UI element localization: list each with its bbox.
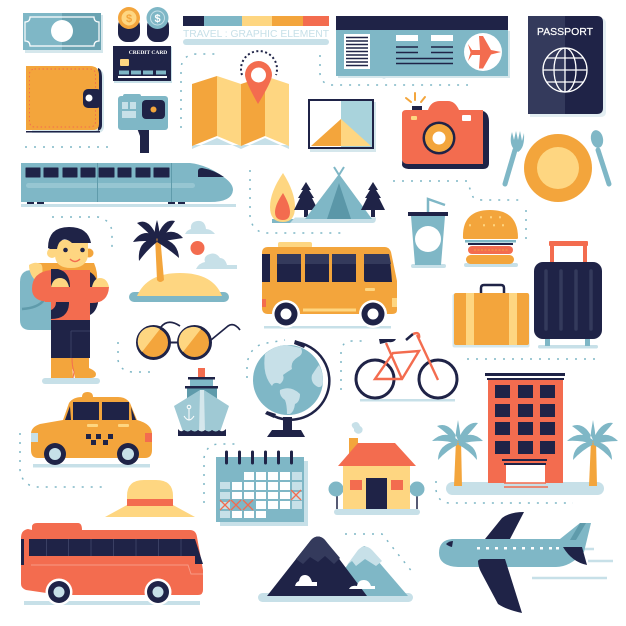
icon: mountains	[258, 536, 413, 602]
icon: airplane	[439, 512, 613, 613]
icon: rolling luggage	[534, 241, 602, 348]
title: TRAVEL : GRAPHIC ELEMENT	[183, 28, 330, 40]
icon: passport: PASSPORT	[537, 26, 594, 38]
icon: calendar	[216, 452, 308, 526]
icon: bullet train	[21, 163, 236, 207]
icon: camera	[402, 93, 489, 169]
icon: burger	[463, 210, 518, 267]
icon: yellow van	[262, 242, 397, 328]
icon: credit card	[113, 46, 172, 83]
icon: action camera	[118, 94, 168, 153]
icon: credit card: CREDIT CARD	[129, 50, 167, 56]
icon: passport	[528, 16, 606, 117]
icon: sunglasses	[138, 322, 240, 358]
icon: coins	[118, 7, 169, 42]
icon: bicycle	[356, 333, 457, 402]
icon: banknote	[23, 13, 103, 53]
icon: globe	[253, 340, 329, 437]
icon: backpacker man	[20, 227, 109, 384]
icon: photo	[309, 100, 376, 152]
icon: briefcase	[452, 285, 530, 348]
icon: ferry ship	[174, 368, 229, 436]
palette bar	[183, 16, 329, 26]
icon: house	[328, 422, 424, 515]
icon: boarding ticket	[336, 16, 510, 79]
icon: camping tents and trees	[290, 167, 385, 223]
icon: hotel with palms	[432, 373, 618, 495]
icon: sun hat	[105, 480, 195, 517]
icon: folded map	[192, 51, 289, 149]
icon: campfire	[270, 173, 295, 223]
icon: coins: $	[126, 13, 132, 25]
icon: drink cup	[408, 199, 448, 268]
icon: coins: $	[154, 13, 161, 25]
icon: plate and cutlery	[505, 129, 609, 202]
icon: taxi	[31, 392, 152, 468]
icon: palm island	[129, 220, 237, 302]
title	[183, 28, 330, 45]
icon: red coach bus	[21, 523, 203, 606]
icon: wallet	[26, 66, 104, 133]
